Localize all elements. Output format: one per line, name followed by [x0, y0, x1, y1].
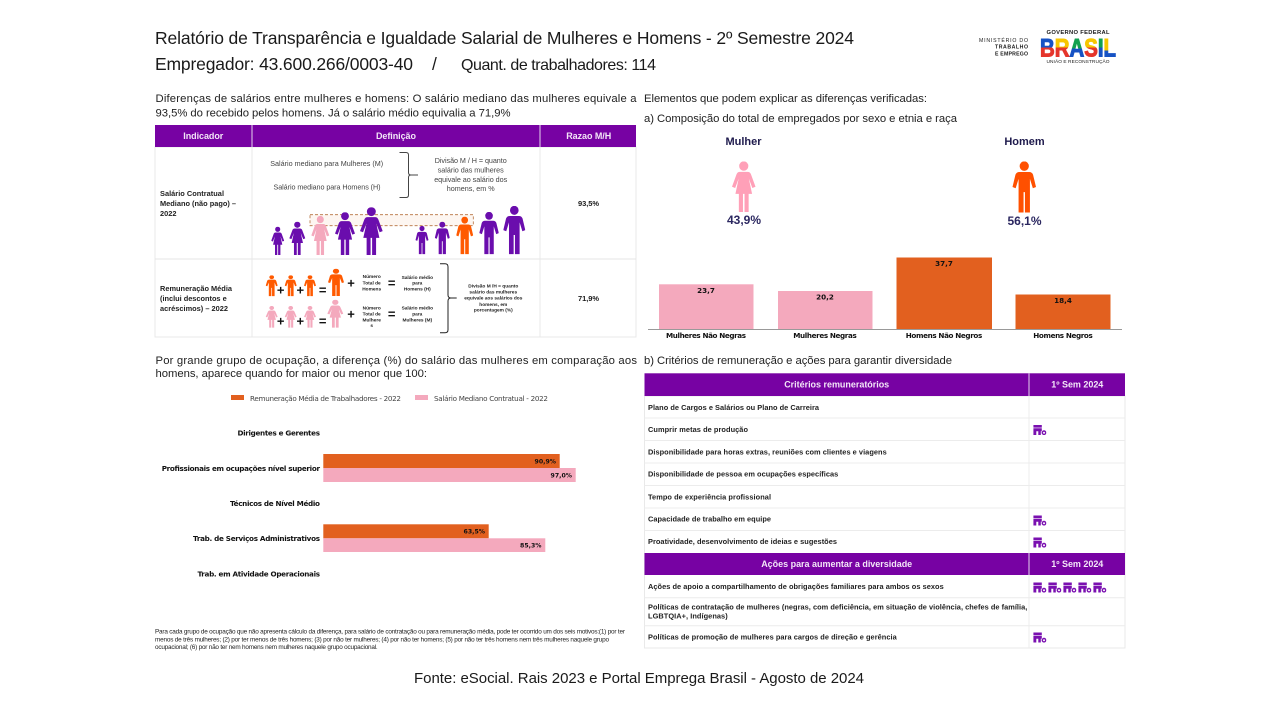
action rows: Políticas de contratação de mulheres (negras, com deficiência, em situação de violência, chefes de família,: [648, 602, 1027, 611]
heading: critérios: b) Critérios de remuneração e ações para garantir diversidade: [644, 355, 952, 367]
brace and division text: salário das mulheres: [469, 290, 517, 296]
header: ações para aumentar a diversidade: Ações para aumentar a diversidade: [761, 559, 912, 569]
logo: ministério: MINISTÉRIO DO: [979, 37, 1028, 44]
row label: salário contratual: [160, 189, 236, 218]
criteria rows: Plano de Cargos e Salários ou Plano de Carreira: [648, 403, 820, 412]
definition: salário mediano: Divisão M / H = quanto: [435, 156, 507, 165]
definition: salário mediano: equivale ao salário dos: [434, 175, 508, 184]
row label: remuneração média: (inclui descontos e: [160, 294, 227, 303]
footnote: menos de três mulheres; (2) por ter menos de três homens; (3) por não ter mulheres; (4) por não ter homens; (5) por não ter três homens nem três mulheres naquele grupo: [155, 636, 609, 643]
title: Empregador: 43.600.266/0003-40: [155, 54, 413, 74]
intro text: grande grupo de ocupação: homens, aparece quando for maior ou menor que 100:: [156, 368, 427, 380]
title: Quant. de trabalhadores: 114: [461, 57, 656, 74]
bar chart: ocupações: 97,0%: [551, 472, 572, 479]
formula: homens: Salário médio: [402, 275, 433, 281]
footnote: ocupacional; (6) por não ter nem homens nem mulheres naquele grupo ocupacional.: [155, 644, 378, 651]
intro text: diferenças de salários: [156, 93, 637, 120]
formula: homens: +: [277, 282, 285, 298]
icons: mulheres: [271, 207, 383, 255]
definition: salário mediano: Salário mediano para Mulheres (M): [270, 159, 383, 168]
definition: salário mediano: salário das mulheres: [438, 166, 504, 174]
panel: homem: 56,1%: [1007, 214, 1042, 228]
panel: homem: Homem: [1004, 136, 1045, 148]
title: /: [432, 54, 437, 74]
icons: homens: [416, 206, 525, 254]
row label: remuneração média: Remuneração Média: [160, 284, 233, 293]
header: ações para aumentar a diversidade: 1º Sem 2024: [1051, 559, 1103, 569]
bar chart: composição: Homens Negros: [1033, 331, 1093, 340]
criteria rows: Capacidade de trabalho em equipe: [648, 515, 771, 524]
formula: homens: +: [347, 276, 355, 290]
value 71,9%: 71,9%: [578, 294, 599, 303]
bar chart: ocupações: Profissionais em ocupações nível superior: [162, 464, 320, 473]
bar chart: composição: Homens Não Negros: [906, 331, 982, 340]
header: critérios remuneratórios: 1º Sem 2024: [1051, 380, 1103, 390]
bar chart: ocupações: Trab. em Atividade Operacionais: [198, 570, 320, 578]
action rows: Políticas de promoção de mulheres para cargos de direção e gerência: [648, 632, 898, 641]
panel: mulher: 43,9%: [727, 213, 761, 227]
formula: mulheres: s: [370, 324, 373, 329]
heading: composição: a) Composição do total de empregados por sexo e etnia e raça: [644, 113, 958, 125]
bar chart: composição: Mulheres Não Negras: [666, 331, 746, 340]
formula: homens: Número: [363, 274, 381, 280]
formula: homens: [266, 269, 433, 298]
bar chart: ocupações: Trab. de Serviços Administrativos: [193, 534, 320, 543]
formula: homens: +: [297, 282, 305, 298]
criteria rows: Proatividade, desenvolvimento de ideias e sugestões: [648, 537, 837, 546]
table header: Definição: [376, 131, 416, 141]
formula: homens: =: [388, 276, 396, 290]
table header: [155, 125, 636, 147]
action rows: LGBTQIA+, Indígenas): [648, 612, 728, 621]
definition: salário mediano: Salário mediano para Homens (H): [274, 182, 380, 192]
formula: homens: para: [412, 280, 423, 286]
intro text: diferenças de salários: Diferenças de salários entre mulheres e homens: O salário mediano das mulheres equivale a: [156, 93, 637, 105]
criteria rows: Disponibilidade de pessoa em ocupações específicas: [648, 470, 838, 479]
row label: remuneração média: [160, 284, 233, 313]
brace and division text: [440, 264, 523, 333]
source line: Fonte: eSocial. Rais 2023 e Portal Emprega Brasil - Agosto de 2024: [414, 670, 864, 687]
logo: ministério: [979, 37, 1028, 58]
header: ações para aumentar a diversidade: [644, 553, 1125, 575]
formula: mulheres: Número: [363, 306, 381, 312]
formula: mulheres: [266, 300, 433, 329]
bar chart: ocupações: Técnicos de Nível Médio: [230, 499, 320, 508]
formula: mulheres: Total de: [363, 312, 381, 318]
footnote: [155, 628, 626, 651]
panel: tabela de critérios e ações: [644, 373, 1125, 648]
bar chart: composição: 23,7: [697, 286, 715, 295]
brace and division text: porcentagem (%): [474, 308, 513, 314]
formula: mulheres: Salário médio: [402, 306, 433, 312]
criteria rows: Cumprir metas de produção: [648, 425, 748, 434]
bar chart: ocupações: 85,3%: [520, 542, 542, 550]
bar chart: composição: [648, 258, 1122, 340]
action marks: [1033, 582, 1106, 642]
intro text: grande grupo de ocupação: [156, 355, 637, 380]
bar chart: composição: 18,4: [1054, 296, 1072, 305]
bar chart: ocupações: 63,5%: [464, 528, 485, 536]
row label: salário contratual: Salário Contratual: [160, 189, 224, 198]
criteria rows: Tempo de experiência profissional: [648, 492, 771, 501]
logo: governo federal brasil: UNIÃO E RECONSTRUÇÃO: [1046, 58, 1110, 65]
header: critérios remuneratórios: Critérios remuneratórios: [784, 380, 889, 390]
formula: mulheres: para: [412, 312, 423, 318]
chart legend: Remuneração Média de Trabalhadores - 2022: [250, 394, 401, 403]
criteria rows: [648, 403, 887, 546]
logo: governo federal brasil: BRASIL: [1040, 34, 1116, 62]
chart legend: [231, 394, 548, 403]
panel: homem: [1004, 136, 1045, 228]
bar chart: composição: Mulheres Negras: [793, 331, 857, 340]
formula: homens: Homens (H): [404, 286, 431, 292]
panel: tabela de indicadores: [155, 125, 636, 337]
bar chart: ocupações: 90,9%: [535, 458, 556, 465]
criteria rows: Disponibilidade para horas extras, reuniões com clientes e viagens: [648, 447, 887, 456]
criteria marks: [1033, 425, 1046, 548]
panel: mulher: Mulher: [725, 136, 762, 148]
value 93,5%: 93,5%: [578, 199, 599, 208]
brace and division text: homens, em: [479, 302, 507, 308]
row label: salário contratual: 2022: [160, 209, 176, 218]
formula: mulheres: Mulheres (M): [403, 318, 432, 324]
formula: mulheres: +: [277, 314, 285, 328]
brace and division text: equivale aos salários dos: [464, 296, 523, 302]
definition: salário mediano: [270, 152, 508, 198]
action rows: [648, 582, 1027, 641]
formula: homens: Homens: [362, 286, 381, 292]
logo: ministério: TRABALHO: [995, 44, 1028, 50]
chart legend: Salário Mediano Contratual - 2022: [434, 394, 548, 403]
logo: governo federal brasil: GOVERNO FEDERAL: [1046, 30, 1110, 36]
bar chart: ocupações: [162, 428, 576, 578]
formula: mulheres: +: [347, 306, 355, 322]
definition: salário mediano: homens, em %: [447, 184, 495, 193]
formula: mulheres: =: [388, 306, 396, 322]
table header: Razao M/H: [566, 131, 611, 141]
header: critérios remuneratórios: [644, 373, 1125, 396]
formula: homens: Total de: [363, 280, 381, 286]
table header: Indicador: [183, 131, 224, 141]
brace and division text: Divisão M /H = quanto: [468, 284, 518, 290]
title: Relatório de Transparência e Igualdade Salarial de Mulheres e Homens - 2º Semestre 2024: [155, 28, 854, 48]
action rows: Ações de apoio a compartilhamento de obrigações familiares para ambos os sexos: [648, 582, 944, 591]
title: [155, 28, 854, 74]
bar chart: ocupações: Dirigentes e Gerentes: [238, 428, 320, 438]
heading: elementos: Elementos que podem explicar as diferenças verificadas:: [644, 93, 927, 105]
formula: homens: =: [319, 282, 327, 298]
row label: salário contratual: Mediano (não pago) –: [160, 199, 236, 208]
formula: mulheres: +: [297, 314, 305, 328]
logo: ministério: E EMPREGO: [995, 52, 1028, 58]
intro text: grande grupo de ocupação: Por grande grupo de ocupação, a diferença (%) do salário das mulheres em comparação aos: [156, 355, 637, 367]
bar chart: composição: 20,2: [816, 292, 834, 302]
footnote: Para cada grupo de ocupação que não apresenta cálculo da diferença, para salário de contratação ou para remuneração média, pode ter ocorrido um dos seis motivos:(1) por ter: [155, 628, 626, 636]
dashed comparison box: [310, 215, 473, 226]
bar chart: composição: 37,7: [935, 259, 953, 268]
panel: mulher: [725, 136, 762, 227]
formula: mulheres: Mulhere: [362, 318, 381, 324]
intro text: diferenças de salários: 93,5% do recebido pelos homens. Já o salário médio equivalia a 71,9%: [156, 108, 510, 120]
formula: mulheres: =: [319, 314, 327, 328]
row label: remuneração média: acréscimos) – 2022: [160, 304, 228, 313]
